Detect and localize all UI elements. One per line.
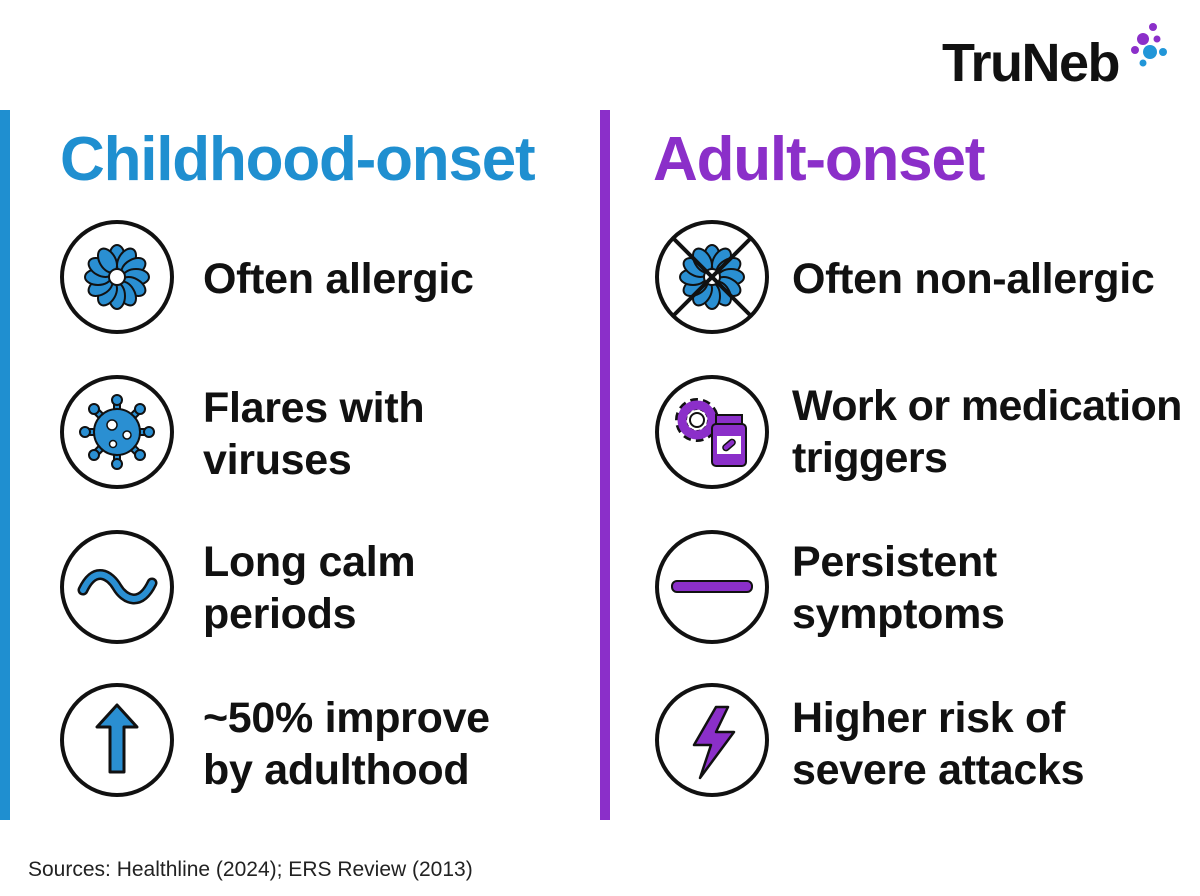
text: 50% improve: ~50% improve [203, 694, 490, 742]
center divider [600, 110, 610, 820]
icon: virus [62, 377, 172, 487]
icon: wave [62, 532, 172, 642]
left accent bar [0, 110, 10, 820]
text: higher risk [792, 694, 1084, 794]
text: long calm periods: periods [203, 590, 356, 638]
text: 50% improve [203, 694, 490, 794]
text: often allergic: Often allergic [203, 255, 474, 303]
logo: TruNeb [942, 33, 1119, 93]
icon: flower [62, 222, 172, 332]
text: persistent symptoms [792, 538, 1005, 638]
icon: crossed flower [657, 222, 767, 332]
text: long calm periods: Long calm [203, 538, 415, 586]
sources: Sources: Healthline (2024); ERS Review (2013) [28, 858, 473, 881]
icon: lightning [657, 685, 767, 795]
text: 50% improve: by adulthood [203, 746, 469, 794]
icon: up arrow [62, 685, 172, 795]
icon: gear and pill bottle [657, 377, 767, 487]
text: persistent symptoms: symptoms [792, 590, 1005, 638]
text: flares with viruses: viruses [203, 436, 352, 484]
icon: flat line [657, 532, 767, 642]
text: often non-allergic: Often non-allergic [792, 255, 1155, 303]
text: work or medication triggers [792, 382, 1182, 482]
heading: childhood-onset: Childhood-onset [60, 125, 534, 194]
text: flares with viruses: Flares with [203, 384, 424, 432]
text: work or medication triggers: Work or medication [792, 382, 1182, 430]
text: higher risk: Higher risk of [792, 694, 1065, 742]
heading: adult-onset: Adult-onset [653, 125, 984, 194]
text: flares with viruses [203, 384, 424, 484]
text: higher risk: severe attacks [792, 746, 1084, 794]
text: long calm periods [203, 538, 415, 638]
text: work or medication triggers: triggers [792, 434, 947, 482]
text: persistent symptoms: Persistent [792, 538, 997, 586]
logo [942, 23, 1167, 93]
